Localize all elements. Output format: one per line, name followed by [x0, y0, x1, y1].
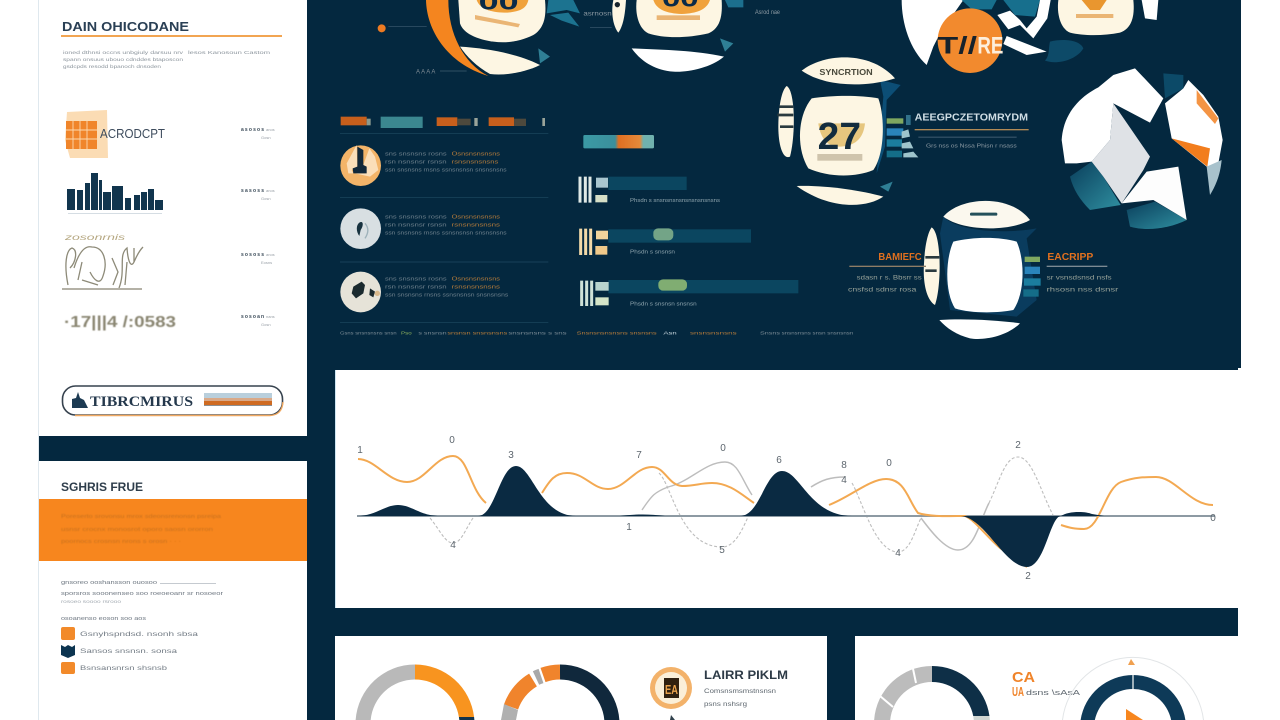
chart labels: 5	[719, 545, 725, 556]
text: orange label: UA	[1012, 684, 1024, 699]
text: footer line: Gsns snsnsnsns snsn	[340, 330, 397, 336]
text: left label: BAMIEFC	[878, 252, 922, 263]
panel: bottom left donuts	[335, 636, 827, 720]
icon: top lens with label: SYNCRTION	[819, 67, 873, 77]
text: list header	[341, 117, 545, 128]
text: footer line: s snsnsn	[418, 330, 447, 336]
text: footer line: snsnsnsnsns	[690, 330, 737, 336]
text block: right side labels: sosoan	[241, 314, 264, 320]
group: large badge 27	[777, 57, 1029, 205]
panel: navy infographic	[340, 0, 1223, 339]
text block: sidebar description	[63, 50, 270, 69]
text block: sidebar paragraph: osoanenso eoson soo aos	[61, 616, 147, 622]
icon: orange crescent	[426, 0, 488, 76]
text: badge caption: psns nshsrg	[704, 701, 747, 708]
chart labels: 1	[626, 522, 632, 533]
text: numeric row: ·17|||4 /:0583	[64, 314, 176, 331]
text block: right side labels: sasoss	[241, 188, 264, 194]
icon: small tick	[670, 715, 675, 720]
text: left label: cnsfsd sdnsr rosa	[848, 287, 917, 293]
icon: orange badge with label: ACRODCPT	[100, 126, 165, 141]
icon: light circle	[340, 272, 381, 312]
icon: bottom lens	[797, 186, 883, 205]
text: orange label: dsns \sAsA	[1026, 688, 1080, 697]
chart labels: 0	[720, 443, 726, 454]
text: footer line: snsnsn snsnsnsns	[447, 330, 508, 336]
text block: sidebar paragraph: rosoeo soooo rsrooo	[61, 599, 122, 604]
icon: orange circle	[340, 145, 381, 186]
icon: cream panel	[636, 0, 722, 37]
text: row 2	[385, 215, 507, 236]
text block: sidebar description: spann onsuus ubouo cdnddes btaposcon	[63, 57, 184, 62]
chart labels: 6	[776, 455, 782, 466]
text block: right side labels: Gosn	[261, 322, 271, 327]
icon: faceted sphere	[1062, 68, 1223, 229]
icon: cream lens	[632, 48, 724, 72]
text: left label	[848, 252, 926, 293]
text: row 2: rsnsnsnsnsns	[452, 223, 500, 229]
text: footer line continuation: snsnsnsns snsn snsnsnsn	[782, 330, 854, 336]
panel: sidebar top	[61, 20, 283, 416]
icon: cream lens	[460, 47, 540, 74]
bar: row 2	[581, 228, 751, 256]
group: third top illustration: RE	[977, 32, 1003, 59]
text: row 2: rsn nsnsnsr rsnsn	[385, 223, 447, 229]
icon: round badge	[650, 667, 692, 709]
text block: right side labels: nans	[266, 314, 275, 319]
text: row 3	[385, 277, 509, 299]
text: side labels: Asrod nae	[755, 10, 781, 16]
callout: orange band: usnsr crocnx monosrot oporo saosn ororron	[61, 527, 213, 533]
heading: sidebar section title: SGHRIS FRUE	[61, 480, 143, 494]
text block: right side labels: sososs	[241, 252, 264, 258]
text: row 3: sns snsnsns rosns	[385, 277, 447, 283]
text: row 1: ssn snsnsns rnsns ssnsnsnsn snsnsnsns	[385, 167, 507, 173]
text: row 1: sns snsnsns rosns	[385, 151, 447, 157]
text: row 2: ssn snsnsns rnsns ssnsnsnsn snsnsnsns	[385, 230, 507, 236]
text block: sidebar paragraph: sporsros sooonenseo soo roeoeoanr sr nosoeor	[61, 591, 223, 597]
icon: blue band	[877, 80, 901, 173]
bar: row 2: Phsdn s snsnsn	[630, 250, 675, 256]
icon: cream panel	[800, 96, 883, 175]
icon: cream panel	[458, 0, 545, 42]
callout: orange band	[39, 499, 307, 561]
text block: right side labels: Eosns	[261, 260, 272, 265]
icon: bottom lens	[939, 319, 1020, 339]
icon: sketch line chart: zosonrnis	[63, 233, 125, 242]
bar: row 3: Phsdn s snsnsn snsnsn	[630, 301, 697, 307]
chart: donut three	[874, 664, 990, 720]
icon: top lens	[943, 201, 1030, 228]
group: left badge	[378, 0, 580, 76]
icon: small bars	[887, 115, 918, 157]
icon: orange circle	[938, 8, 1002, 73]
icon: blue band	[940, 217, 1037, 317]
icon: left lens	[924, 227, 940, 305]
text block: sidebar description: lesos Kanosoun Castom	[188, 50, 270, 55]
group: lower badge	[848, 201, 1118, 339]
text: row 1	[385, 151, 507, 173]
chart labels: 8	[841, 460, 847, 471]
text: row 1: Osnsnsnsnsns	[452, 151, 500, 157]
text: row 2: sns snsnsns rosns	[385, 215, 447, 221]
chart: donut one	[356, 664, 474, 720]
chart labels: 2	[1015, 440, 1021, 451]
text: row 2: Osnsnsnsnsns	[452, 215, 500, 221]
callout: orange band: Poreserto srovonsu mrox sdeonsrenonsn psreipa	[61, 514, 222, 520]
legend: Gsnyhspndsd. nsonh sbsa	[80, 631, 199, 638]
bar: row 1: Phsdn s snsnsnsnsnsnsnsnsnsns	[630, 198, 720, 204]
text: footer line: Asn	[663, 330, 677, 336]
chart labels: 4	[841, 475, 847, 486]
text: row 1: rsnsnsnsnsns	[452, 159, 499, 165]
icon: white shard	[902, 0, 963, 65]
bar: row 1	[580, 177, 720, 204]
text: footer line: Pso	[401, 330, 412, 336]
chart: donut four	[1062, 657, 1204, 720]
text: right label	[1047, 252, 1118, 293]
panel: wave chart	[335, 370, 1238, 608]
chart labels: 4	[895, 548, 901, 559]
text: row 1: rsn nsnsnsr rsnsn	[385, 159, 447, 165]
icon: skyline bars	[67, 173, 163, 214]
group: third top illustration	[902, 0, 1158, 73]
icon: left lens	[778, 86, 794, 157]
text: right label: EACRIPP	[1047, 252, 1094, 263]
panel: bottom right donuts	[855, 636, 1238, 720]
callout: rounded pill	[62, 386, 283, 416]
bar: row 3	[582, 279, 798, 307]
chart labels	[357, 435, 1216, 582]
text block: right side labels: Gosn	[261, 196, 271, 201]
text: marker label: A A A A	[416, 69, 435, 75]
legend	[61, 627, 199, 674]
text: badge caption	[704, 688, 776, 708]
icon: cream panel	[1058, 0, 1134, 35]
chart labels: 0	[1210, 513, 1216, 524]
text: right label: sr vsnsdsnsd nsfs	[1047, 275, 1112, 281]
bar: legend chip	[583, 135, 654, 148]
icon: white shard	[1142, 0, 1158, 20]
legend: Sansos snsnsn. sonsa	[80, 648, 178, 655]
text: side labels	[583, 10, 781, 17]
chart: wave lines and area	[357, 456, 1215, 567]
heading: sidebar title: DAIN OHICODANE	[62, 20, 189, 34]
icon: white panel	[947, 238, 1023, 312]
text block: sidebar description: ioned dthnsi occns unbgiuly darsuu nrv	[63, 50, 184, 55]
text: footer line: snsnsnsns s sns	[508, 330, 567, 336]
chart labels: 3	[508, 450, 514, 461]
icon: orange badge with label	[65, 110, 165, 158]
text: footer line	[340, 330, 781, 336]
icon: grey circle	[340, 208, 381, 249]
chart labels: 0	[886, 458, 892, 469]
text: badge heading: AEEGPCZETOMRYDM	[915, 113, 1028, 124]
text block: right side labels: Gosn	[261, 135, 271, 140]
text block: right side labels: asosos	[241, 127, 264, 133]
text: orange label	[1012, 669, 1080, 699]
text block: sidebar description: gsdcpds resodd bpanoch dnsoden	[63, 64, 162, 69]
icon: teal shards	[547, 0, 580, 27]
chart: horizontal bars	[580, 135, 798, 307]
callout: orange band: poornocs crosnsn nrons s orosn · · ·	[61, 539, 181, 545]
text block: right side labels: anos	[266, 188, 275, 193]
text block: sidebar paragraph: gnsoreo ooshansson ouosoo	[61, 580, 157, 586]
text: badge caption: Comsnsmsmstnsnsn	[704, 688, 776, 695]
text: badge caption: Grs nss os Nssa Phisn r nsass	[926, 144, 1017, 150]
text: side labels: asrnosn	[583, 11, 612, 17]
icon: top lens with label	[802, 57, 895, 84]
text: left label: sdasn r s. Bbsrr ss	[857, 275, 922, 281]
text: orange label: CA	[1012, 669, 1035, 686]
text: footer line: Snsns	[760, 330, 781, 336]
text: footer line: Snsnsnsnsnsns snsnsns	[577, 330, 657, 336]
text: row 3: rsnsnsnsnsns	[452, 285, 500, 291]
text: badge heading: LAIRR PIKLM	[704, 668, 788, 682]
callout: rounded pill: TIBRCMIRUS	[90, 394, 193, 410]
legend: Bsnsansnrsn shsnsb	[80, 665, 168, 672]
group: left list	[340, 117, 854, 336]
chart labels: 7	[636, 450, 642, 461]
text block: right side labels: anos	[266, 127, 275, 132]
icon: sketch line chart	[62, 233, 143, 289]
chart labels: 0	[449, 435, 455, 446]
text: right label: rhsosn nss dsnsr	[1047, 287, 1118, 293]
icon: orange marker	[378, 24, 386, 32]
text block: right side labels: anos	[266, 252, 275, 257]
text block: right side labels	[241, 127, 275, 327]
chart labels: 1	[357, 445, 363, 456]
icon: round badge: EA	[665, 682, 678, 697]
text: row 3: Osnsnsnsnsns	[452, 277, 500, 283]
chart labels: 2	[1025, 571, 1031, 582]
chart: donut two	[501, 664, 619, 720]
icon: small bars	[1023, 257, 1041, 297]
chart labels: 4	[450, 540, 456, 551]
text: large number: 27	[818, 115, 861, 158]
text block: sidebar paragraph	[61, 580, 223, 622]
text: row 3: ssn snsnsns rnsns ssnsnsnsn snsnsnsns	[385, 293, 509, 299]
group: center badge	[583, 0, 781, 72]
text: circle label: T//	[938, 32, 977, 59]
text: row 3: rsn nsnsnsr rsnsn	[385, 285, 447, 291]
panel: sidebar bottom	[39, 480, 307, 674]
